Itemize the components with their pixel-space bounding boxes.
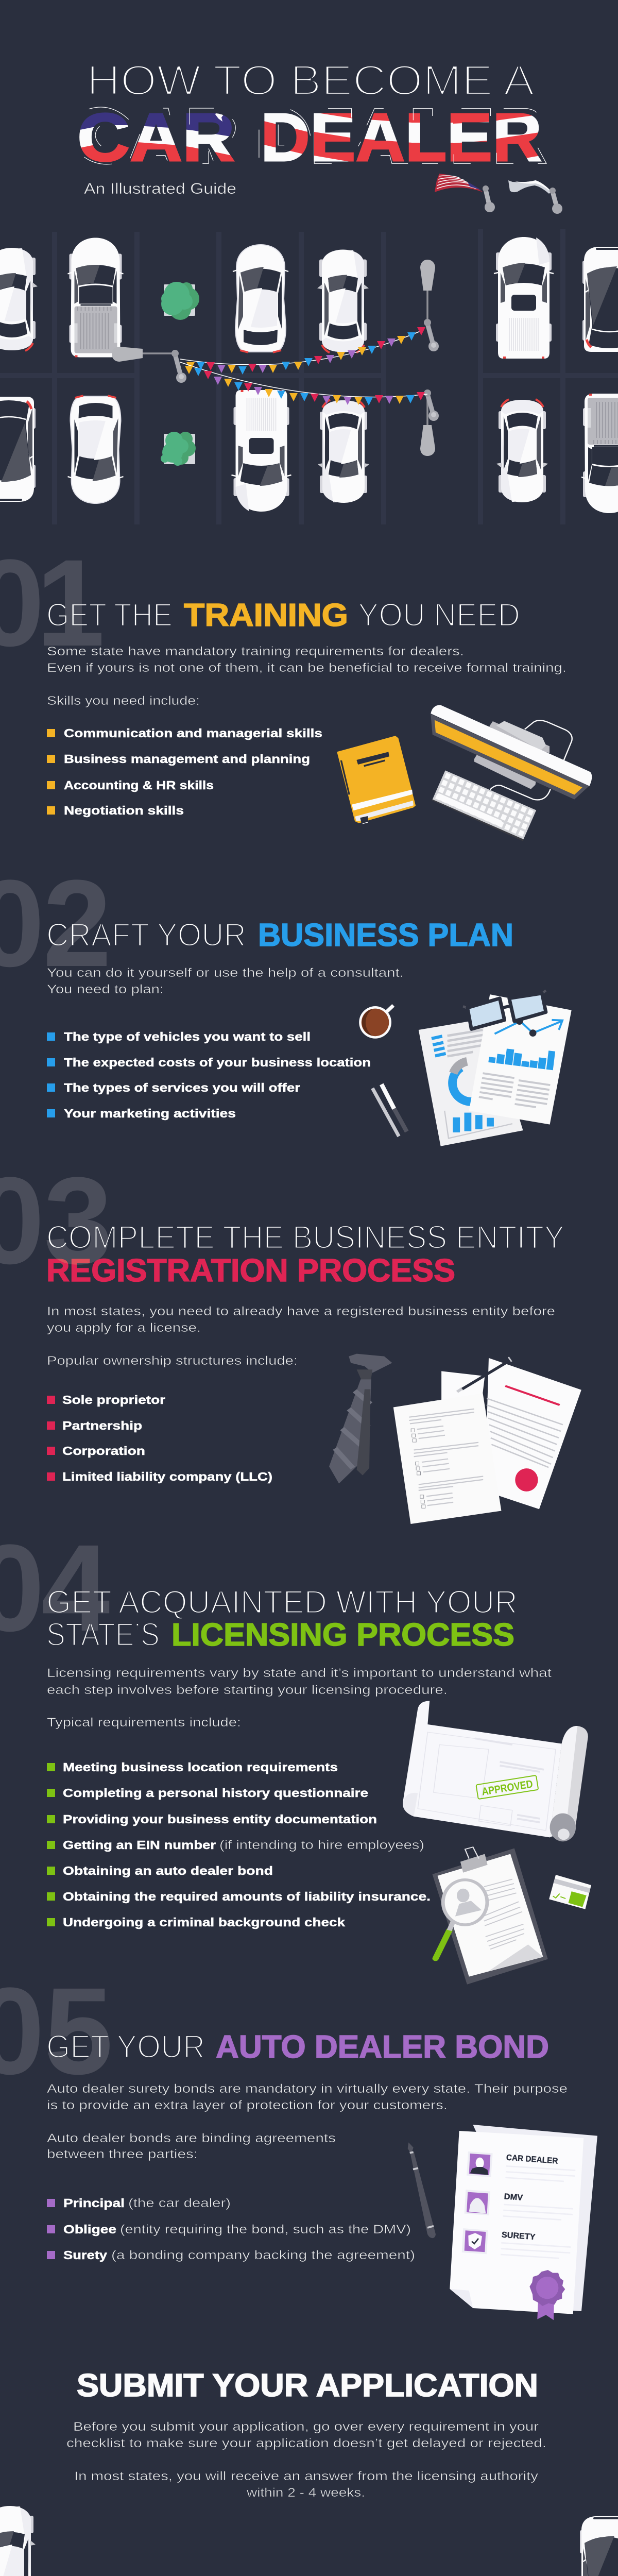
title xyxy=(77,56,546,175)
parties list: Obligee xyxy=(63,2223,116,2236)
icon: computer and keyboard xyxy=(431,705,592,841)
text block: checklist to make sure your application doesn’t get delayed or rejected. xyxy=(66,2436,546,2450)
car: pickup flipped xyxy=(581,394,618,513)
stamp: approved: APPROVED xyxy=(481,1778,534,1798)
title line: car dealer: DEALER xyxy=(261,99,542,175)
skills list xyxy=(47,726,322,817)
parked cars top row xyxy=(0,237,618,359)
label: surety: SURETY xyxy=(501,2231,536,2242)
heading: craft your business plan: CRAFT YOUR xyxy=(46,917,246,953)
heading: get the training you need: GET THE xyxy=(46,597,173,633)
car: coupe flipped xyxy=(496,399,548,502)
panel: submit your application xyxy=(66,2368,546,2500)
requirements list xyxy=(47,1760,431,1929)
car: coupe xyxy=(317,249,369,352)
car: muscle xyxy=(494,237,554,359)
text block: Even if yours is not one of them, it can be beneficial to receive formal training. xyxy=(47,661,566,675)
parking lot lines xyxy=(0,229,618,524)
text block: you apply for a license. xyxy=(47,1321,201,1335)
parties list: Principal xyxy=(63,2196,125,2210)
text block: Popular ownership structures include: xyxy=(47,1354,298,1368)
title line: car dealer: CAR xyxy=(77,99,235,175)
skills list: Business management and planning xyxy=(64,752,310,766)
requirements list: Obtaining an auto dealer bond xyxy=(63,1864,273,1877)
heading: get acquainted with your state's licensing process: LICENSING PROCESS xyxy=(171,1617,514,1653)
label: car dealer: CAR DEALER xyxy=(506,2154,558,2166)
title line: car dealer xyxy=(77,99,546,175)
bunting upper xyxy=(180,327,425,375)
text block xyxy=(47,966,404,996)
parties list: (the car dealer) xyxy=(128,2196,231,2210)
heading: SUBMIT YOUR APPLICATION xyxy=(77,2368,538,2403)
car: sedan flipped xyxy=(68,396,124,504)
icon: bond document xyxy=(450,2125,597,2320)
car: coupe flipped xyxy=(318,400,369,503)
planning list: The type of vehicles you want to sell xyxy=(64,1030,311,1043)
ownership list: Sole proprietor xyxy=(62,1393,165,1406)
heading: craft your business plan xyxy=(46,917,513,953)
car: muscle flipped xyxy=(232,390,291,512)
text block: within 2 - 4 weeks. xyxy=(246,2486,365,2500)
skills list: Negotiation skills xyxy=(64,804,184,817)
text block: In most states, you need to already have a registered business entity before xyxy=(47,1304,555,1318)
heading: get acquainted with your state's licensing process: STATE’S xyxy=(46,1617,160,1653)
car: sedan xyxy=(233,244,288,352)
tree top xyxy=(161,282,199,320)
text block: You need to plan: xyxy=(47,982,164,996)
requirements list: Providing your business entity documentation xyxy=(63,1812,377,1826)
heading: complete the business entity registration process: REGISTRATION PROCESS xyxy=(46,1253,455,1289)
text block xyxy=(66,2420,546,2500)
panel: step 3 registration xyxy=(0,1151,581,1524)
text block: each step involves before starting your licensing procedure. xyxy=(47,1683,448,1697)
parties list: (a bonding company backing the agreement) xyxy=(111,2248,415,2262)
planning list xyxy=(47,1030,371,1120)
parties list: Surety xyxy=(63,2248,107,2262)
text block xyxy=(47,1666,552,1730)
car: pickup xyxy=(68,238,124,358)
text block: Some state have mandatory training requirements for dealers. xyxy=(47,645,464,658)
heading: complete the business entity registration process xyxy=(46,1219,564,1289)
requirements list: Obtaining the required amounts of liability insurance. xyxy=(63,1890,431,1903)
icon: white flag on pole xyxy=(508,180,562,214)
label: dmv: DMV xyxy=(504,2192,523,2202)
text block: between three parties: xyxy=(47,2147,198,2161)
planning list: The expected costs of your business location xyxy=(64,1056,371,1069)
text block xyxy=(47,2082,568,2161)
car: coupe xyxy=(0,2506,36,2576)
text block: Licensing requirements vary by state and it’s important to understand what xyxy=(47,1666,552,1680)
requirements list: Getting an EIN number xyxy=(63,1838,216,1852)
panel: step 1 training xyxy=(0,534,592,841)
heading: get your auto dealer bond xyxy=(46,2029,549,2065)
subtitle: An Illustrated Guide xyxy=(84,180,236,197)
text block xyxy=(47,1304,555,1368)
skills list: Communication and managerial skills xyxy=(64,726,322,740)
tree bottom xyxy=(161,432,196,466)
heading: get the training you need xyxy=(46,597,520,633)
text block: You can do it yourself or use the help of a consultant. xyxy=(47,966,404,980)
icon: clipboard and magnifier xyxy=(433,1847,548,1985)
text block: Skills you need include: xyxy=(47,694,200,708)
lamp post right top xyxy=(420,260,439,351)
text block: In most states, you will receive an answer from the licensing authority xyxy=(74,2469,538,2483)
lamp post middle left xyxy=(112,347,186,383)
heading: get the training you need: TRAINING xyxy=(184,598,348,633)
icon: reports and glasses xyxy=(419,990,572,1146)
bunting lower xyxy=(180,362,427,405)
car: coupe xyxy=(0,248,38,351)
text block: Typical requirements include: xyxy=(47,1716,241,1730)
icon: necktie xyxy=(329,1354,392,1484)
requirements list: (if intending to hire employees) xyxy=(219,1838,424,1852)
heading: complete the business entity registration process: COMPLETE THE BUSINESS ENTITY xyxy=(46,1219,564,1256)
heading: craft your business plan: BUSINESS PLAN xyxy=(258,918,513,953)
icon: documents and pen xyxy=(393,1357,581,1524)
panel: step 5 auto dealer bond xyxy=(0,1962,597,2320)
icon: american flag on pole xyxy=(435,174,495,212)
text block: Auto dealer bonds are binding agreements xyxy=(47,2131,336,2145)
panel: step 4 licensing xyxy=(0,1519,591,1985)
parties list xyxy=(47,2196,415,2262)
car: suv xyxy=(580,2516,618,2576)
requirements list: Meeting business location requirements xyxy=(63,1760,338,1774)
text block: Before you submit your application, go over every requirement in your xyxy=(73,2420,539,2434)
icon: fountain pen xyxy=(408,2142,436,2238)
ownership list: Limited liability company (LLC) xyxy=(62,1470,272,1483)
icon: book xyxy=(337,736,415,824)
heading: get the training you need: YOU NEED xyxy=(358,597,520,633)
requirements list: Completing a personal history questionnaire xyxy=(63,1786,368,1800)
planning list: The types of services you will offer xyxy=(64,1081,300,1094)
car: suv xyxy=(582,247,618,352)
ownership list: Partnership xyxy=(62,1419,142,1432)
icon: coffee mug xyxy=(359,1006,393,1039)
ownership list: Corporation xyxy=(62,1444,145,1458)
icon: approved blueprint xyxy=(403,1701,588,1841)
parked cars bottom row xyxy=(0,390,618,513)
heading: get your auto dealer bond: GET YOUR xyxy=(46,2029,205,2065)
heading: get acquainted with your state's licensing process xyxy=(46,1584,518,1653)
icon: pens xyxy=(372,1084,407,1137)
text block: is to provide an extra layer of protection for your customers. xyxy=(47,2098,448,2112)
heading: get acquainted with your state's licensing process: GET ACQUAINTED WITH YOUR xyxy=(46,1584,518,1620)
ownership list xyxy=(47,1393,272,1483)
car: suv flipped xyxy=(0,397,36,502)
panel: step 2 business plan xyxy=(0,854,572,1146)
lamp post right bottom xyxy=(420,389,439,456)
title line: how to become a: HOW TO BECOME A xyxy=(87,56,535,104)
planning list: Your marketing activities xyxy=(64,1107,236,1120)
parked cars left bottom xyxy=(0,2506,122,2576)
text block xyxy=(47,645,566,708)
heading: get your auto dealer bond: AUTO DEALER BOND xyxy=(216,2029,549,2065)
requirements list: Undergoing a criminal background check xyxy=(63,1916,345,1929)
parties list: (entity requiring the bond, such as the DMV) xyxy=(120,2223,411,2236)
text block: Auto dealer surety bonds are mandatory in virtually every state. Their purpose xyxy=(47,2082,568,2096)
skills list: Accounting & HR skills xyxy=(64,778,214,792)
icon: id card xyxy=(549,1875,591,1909)
parked cars right bottom xyxy=(493,2516,618,2576)
